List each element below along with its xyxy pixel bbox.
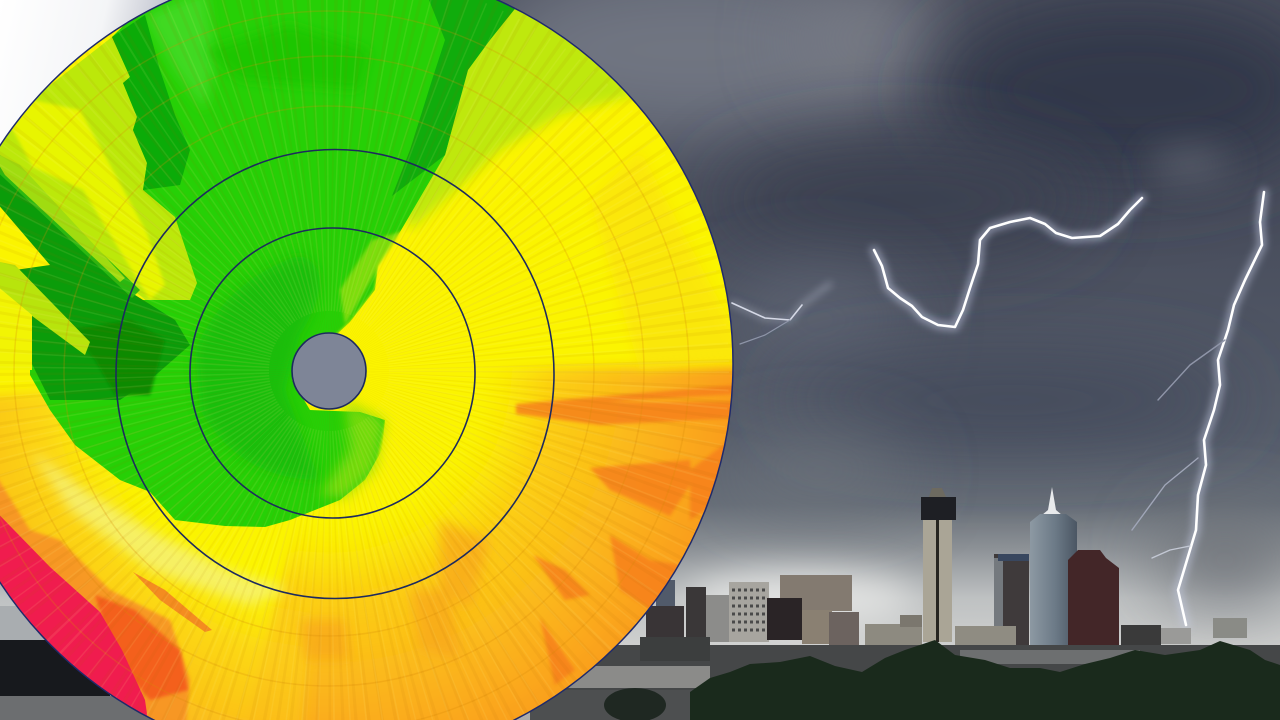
low roofs and foreground [530,637,1280,720]
tree line [690,640,1280,720]
red-orange mix [95,595,188,700]
top-left white corner [0,0,175,150]
lime finger left [0,260,90,355]
yellow central wedge [335,230,402,492]
dark green top-right streak [392,0,515,196]
lime streak in band [0,150,125,282]
lime around hole [320,400,385,498]
lightning bolt: right [1132,192,1264,625]
orange lower-left [0,480,192,720]
darkest green core [70,320,165,395]
inner dark spiral [195,255,320,480]
deeper green top patch [204,30,366,88]
upper-right edge tint [594,158,732,372]
lighter green top streak [145,0,215,110]
radar outer edge [0,0,733,720]
tower: tall dark-top [921,488,956,642]
lime halo around centre [340,232,400,325]
main bright green area [30,0,454,527]
dark green diagonal wedge [0,165,190,400]
amber streak lower centre [300,520,490,660]
lightning bolt: left faint [732,284,830,344]
radar base yellow field [0,0,740,720]
orange streak lower-left [133,572,212,632]
lightning bolt: central [874,198,1142,327]
red sector [0,516,148,716]
left edge buildings [0,606,160,720]
segment rings [0,11,689,720]
tower: glass spire [1030,487,1077,645]
tower: maroon [1068,550,1119,647]
radial texture light [99,141,559,601]
radar range ring inner [190,228,475,518]
pale yellow band lower-left [30,450,290,605]
yellow patch far left [0,280,32,370]
city skyline [0,487,1280,720]
dark green upper-left streak [112,15,190,190]
lime left band outer [0,37,197,320]
orange band right [516,385,735,685]
lower-left amber field [0,388,306,720]
green streak upper band [0,150,140,298]
radial texture dark [114,156,544,586]
radar centre hole [292,333,366,409]
yellow left band core [10,100,165,300]
dark shrub [604,688,666,720]
radar disc [0,0,760,720]
radar range ring outer [116,150,554,598]
tower: dark block [994,554,1029,646]
mid-rise buildings [646,575,1247,648]
upper-right lime fan [400,0,635,230]
lower-right amber field [240,365,760,720]
